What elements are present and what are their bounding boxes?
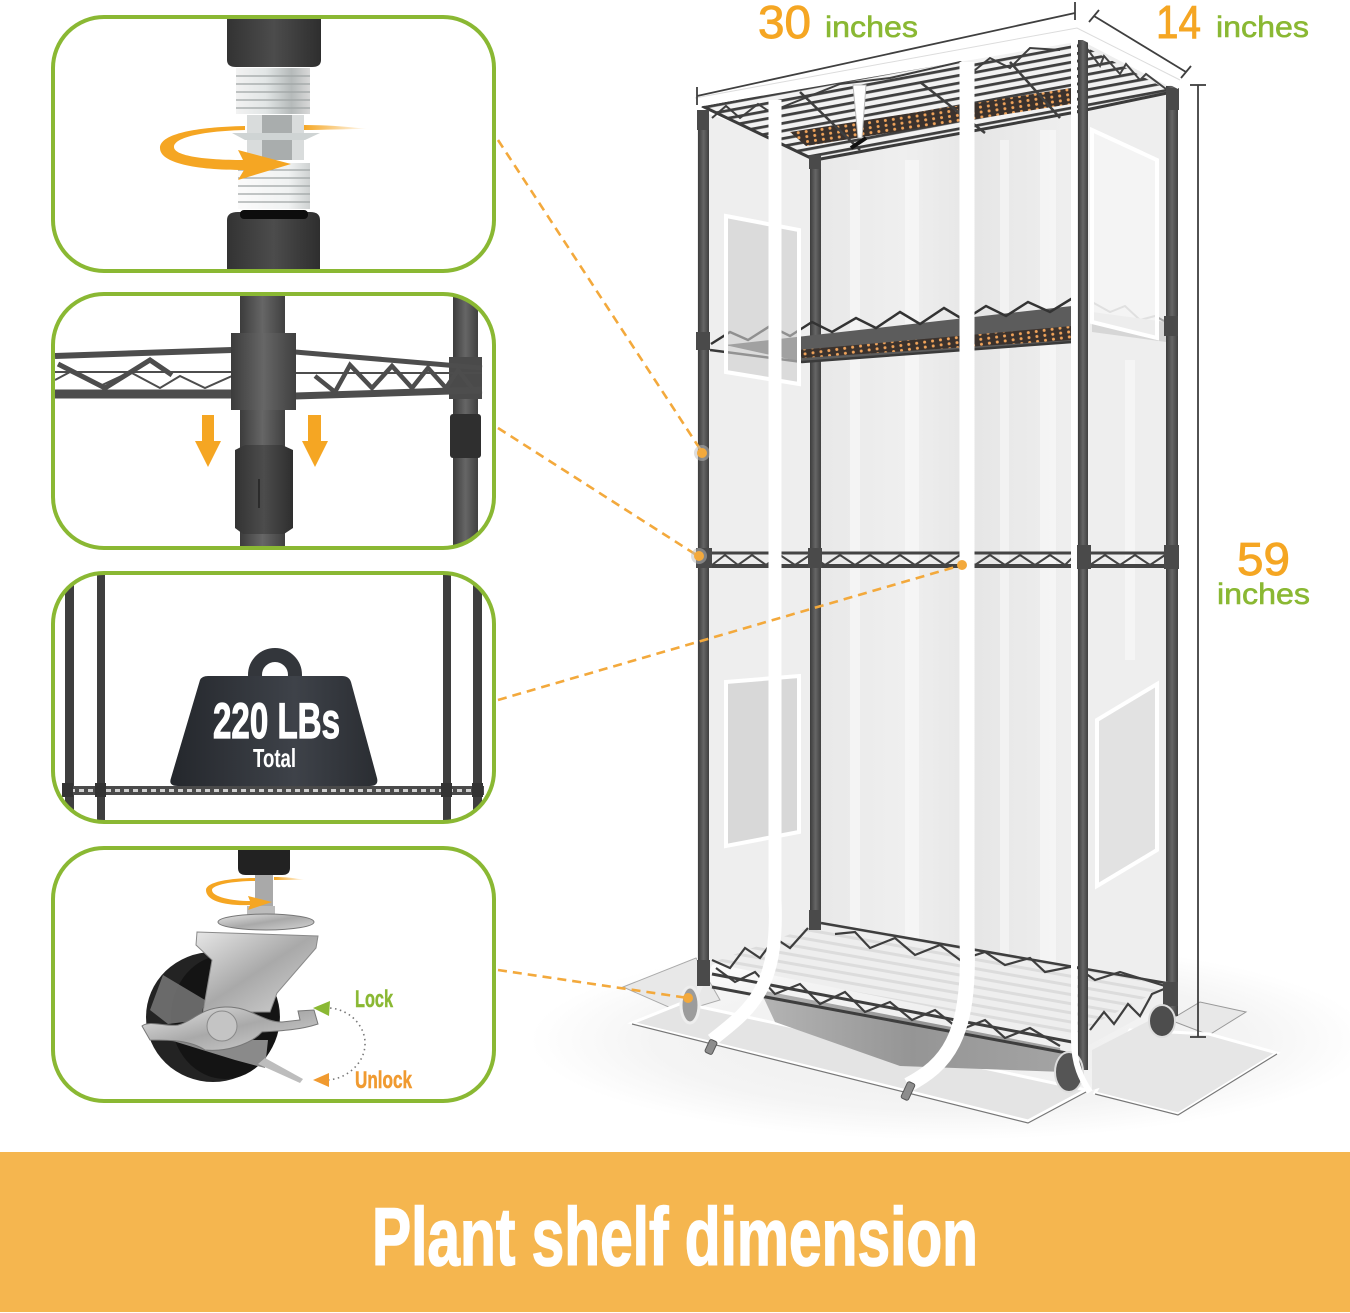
weight icon <box>170 655 377 786</box>
label: 14 inches: inches <box>1216 11 1309 44</box>
label: 14 inches <box>1156 0 1309 48</box>
clear cover right panel <box>1080 40 1172 1050</box>
panel border <box>53 573 494 822</box>
zipper pull <box>851 85 866 148</box>
weight label: 220 LBs <box>213 693 340 749</box>
third wire shelf <box>700 553 1172 566</box>
post connectors <box>696 88 1179 1006</box>
banner title: Plant shelf dimension <box>372 1192 978 1283</box>
upper pole <box>227 15 321 67</box>
dimension: depth line <box>1089 10 1191 78</box>
back left post <box>810 160 821 932</box>
rotation arrow <box>160 125 368 180</box>
unlock label: Unlock <box>355 1067 412 1094</box>
main post <box>240 295 285 550</box>
clear cover front-left panel <box>697 110 815 1000</box>
second wire shelf with LED strip <box>710 296 1166 362</box>
top wire shelf <box>702 42 1172 160</box>
label: 59 inches: 59 <box>1237 533 1290 585</box>
panel border <box>53 848 494 1101</box>
panel: shelf slides onto sleeve <box>53 294 494 550</box>
panel: 220 LBs load capacity <box>53 573 494 824</box>
unlock arrowhead <box>313 1073 329 1087</box>
weight sublabel: Total <box>253 743 296 773</box>
plastic skirt right <box>1092 1015 1175 1090</box>
front right post <box>1078 40 1088 1070</box>
threaded insert <box>232 68 320 209</box>
lower pole <box>227 212 320 275</box>
shelf wire right <box>295 352 482 396</box>
lock arrowhead <box>313 1001 330 1016</box>
label: 59 inches <box>1217 533 1310 611</box>
windows <box>726 130 1157 886</box>
dimension: width line <box>697 2 1075 105</box>
label: 30 inches: inches <box>825 11 918 44</box>
brake lever <box>142 1007 318 1083</box>
strap clasps <box>704 1039 915 1101</box>
lock arc <box>328 1008 365 1080</box>
shelf posts <box>65 574 482 824</box>
callout lines <box>498 140 967 1003</box>
shelf collar <box>231 333 296 410</box>
stem and nut <box>218 875 314 930</box>
clear cover back panel <box>815 85 1172 985</box>
arrows pointing down <box>195 415 328 467</box>
curtain folds <box>850 130 1135 990</box>
panel: threaded pole connection <box>53 15 494 275</box>
wheel <box>146 952 280 1082</box>
small rotation arrow <box>206 877 305 910</box>
bottom wire shelf <box>711 923 1176 1090</box>
plastic skirt <box>760 990 1064 1072</box>
back right post <box>1166 86 1178 1016</box>
rear post <box>449 295 482 550</box>
floor shadow <box>530 940 1350 1140</box>
pole end <box>238 849 290 875</box>
banner <box>0 1152 1350 1312</box>
label: 30 inches <box>758 0 918 48</box>
panel border <box>53 294 494 548</box>
product illustration: plant shelf with cover <box>623 28 1277 1123</box>
floor mats <box>623 958 1277 1123</box>
caster bracket <box>196 932 318 1012</box>
casters <box>681 987 1175 1092</box>
panel border <box>53 17 494 271</box>
top cover hem <box>695 28 1180 103</box>
label: 59 inches: inches <box>1217 578 1310 611</box>
lock label: Lock <box>355 986 393 1013</box>
front left post <box>698 110 709 985</box>
panel: locking caster wheel <box>53 848 494 1101</box>
cover straps <box>712 32 1090 1092</box>
lower sleeve <box>235 445 293 534</box>
dimension: height line <box>1190 85 1206 1037</box>
shelf wire <box>62 783 484 797</box>
shelf wire left <box>55 350 232 394</box>
